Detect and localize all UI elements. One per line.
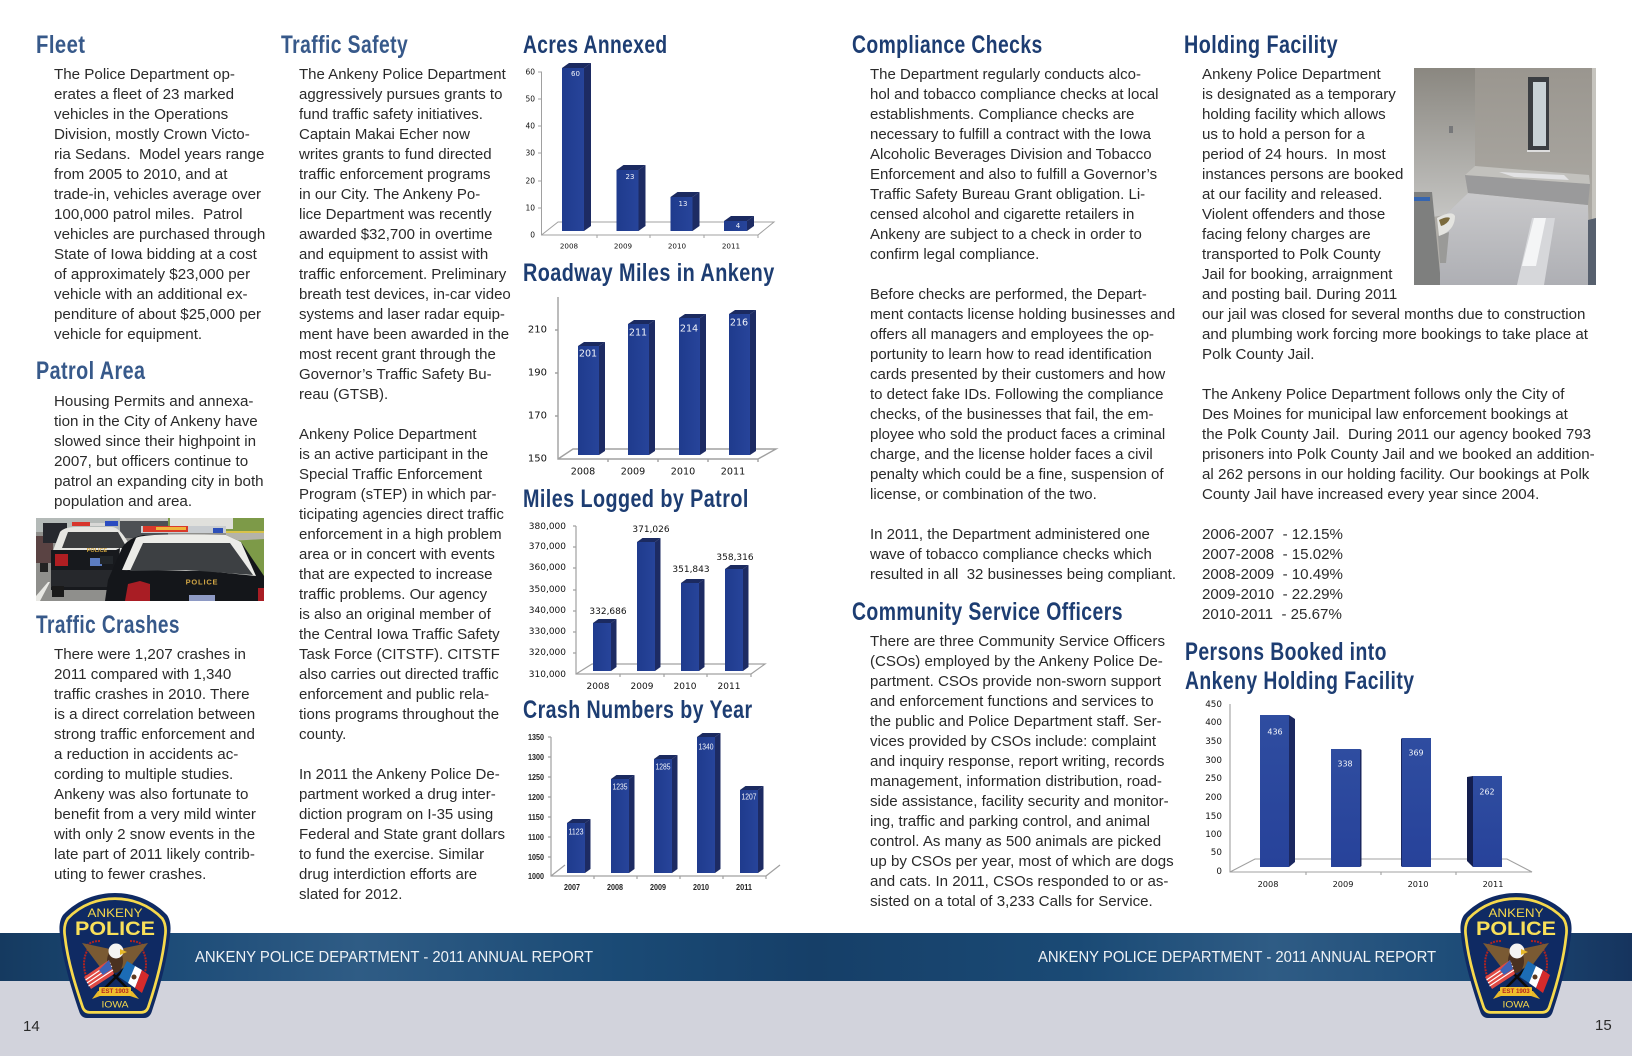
x axis labels: [571, 466, 745, 478]
shield text top: ANKENY: [88, 908, 143, 920]
bar 2009: [654, 755, 678, 873]
value labels: 23: [626, 173, 634, 181]
value labels: 371,026: [632, 525, 670, 535]
y axis labels: 300: [1205, 756, 1222, 766]
eagle and flags: [1483, 941, 1550, 995]
value labels: 369: [1408, 748, 1424, 758]
x axis labels: 2008: [587, 682, 610, 692]
x axis labels: 2008: [560, 242, 579, 250]
x axis labels: 2009: [650, 882, 666, 892]
y axis labels: 0: [530, 230, 535, 240]
y axis labels: 1050: [528, 852, 544, 862]
heading: Compliance Checks: Compliance Checks: [852, 31, 1043, 59]
x axis labels: 2009: [621, 466, 645, 478]
value labels: [568, 742, 757, 836]
y axis labels: 400: [1205, 718, 1222, 728]
x axis labels: [560, 242, 740, 250]
x axis labels: 2010: [1408, 879, 1428, 889]
y axis labels: 150: [1205, 812, 1222, 822]
text: Traffic Crashes: There were 1,207 crashes in 2011 compared with 1,340 traffic crashes in 2010. There is a direct correlation between strong traffic enforcement and a reduction in accidents ac- cording to multiple studies. Ankeny was also fortunate to benefit from a very mild winter with only 2 snow events in the late part of 2011 likely contrib- uting to fewer crashes.: [54, 646, 256, 883]
chart: Roadway Miles in Ankeny: [528, 297, 776, 478]
y axis labels: 40: [525, 122, 535, 130]
text: Traffic Safety: The Ankeny Police Department aggressively pursues grants to fund traffic safety initiatives. Captain Makai Echer now writes grants to fund directed traffic enforcement programs in our City. The Ankeny Po- lice Department was recently awarded $32,700 in overtime and equipment to assist with traffic enforcement. Preliminary breath test devices, in-car video systems and laser radar equip- ment have been awarded in the most recent grant through the Governor’s Traffic Safety Bu- reau (GTSB). Ankeny Police Department is an active participant in the Special Traffic Enforcement Program (sTEP) in which par- ticipating agencies direct traffic enforcement in a high problem area or in concert with events that are expected to increase traffic problems. Our agency is also an original member of the Central Iowa Traffic Safety Task Force (CITSTF). CITSTF also carries out directed traffic enforcement and public rela- tions programs throughout the county. In 2011 the Ankeny Police De- partment worked a drug inter- diction program on I-35 using Federal and State grant dollars to fund the exercise. Similar drug interdiction efforts are slated for 2012.: [299, 66, 511, 903]
heading: Persons Booked into Ankeny Holding Facility: [1185, 638, 1414, 695]
y axis labels: 190: [528, 368, 547, 378]
x axis labels: 2011: [722, 242, 740, 250]
heading: Acres Annexed: Acres Annexed: [523, 31, 668, 59]
heading: Persons Booked into Ankeny Holding Facility: Persons Booked into: [1185, 638, 1387, 666]
value labels: 332,686: [589, 607, 627, 617]
x axis labels: [587, 682, 740, 692]
y axis labels: [529, 522, 566, 680]
y axis labels: 20: [525, 176, 535, 186]
footer title right: ANKENY POLICE DEPARTMENT - 2011 ANNUAL REPORT: [1038, 949, 1436, 966]
x axis labels: 2011: [721, 466, 745, 478]
y axis labels: 1000: [528, 871, 544, 881]
axes and floor: [573, 526, 765, 677]
bar 2008: [593, 619, 616, 671]
value labels: 1123: [568, 828, 584, 836]
y axis labels: 1300: [528, 752, 544, 762]
x axis labels: 2011: [736, 882, 752, 892]
y axis labels: 250: [1205, 774, 1222, 784]
value labels: 358,316: [716, 553, 754, 563]
x axis labels: 2010: [671, 466, 695, 478]
eagle and flags: [82, 941, 149, 995]
heading: Traffic Crashes: Traffic Crashes: [36, 611, 180, 639]
bar 2010: [681, 579, 704, 671]
y axis labels: 150: [528, 454, 547, 464]
shield banner: EST 1903: [1502, 988, 1530, 995]
x axis labels: 2009: [614, 242, 633, 250]
value labels: 436: [1267, 728, 1283, 736]
chart: Miles Logged by Patrol: [529, 522, 765, 692]
value labels: 262: [1479, 788, 1495, 796]
axes and floor: [1230, 704, 1532, 875]
value labels: 201: [579, 348, 597, 360]
photo: police cars: POLICE: [186, 578, 218, 586]
x axis labels: 2009: [1333, 879, 1353, 889]
bar 2008: [562, 63, 591, 231]
x axis labels: [564, 882, 752, 892]
y axis labels: 0: [1216, 867, 1222, 877]
y axis labels: 350,000: [529, 585, 566, 595]
value labels: 13: [679, 200, 687, 208]
value labels: 211: [629, 328, 647, 338]
value labels: 216: [730, 318, 748, 328]
bar 2009: [1331, 749, 1362, 867]
bar 2008: [1260, 715, 1295, 867]
bar 2011: [725, 565, 748, 671]
text: Fleet: The Police Department op- erates a fleet of 23 marked vehicles in the Operations Division, mostly Crown Victo- ria Sedans. Model years range from 2005 to 2010, and at trade-in, vehicles average over 100,000 patrol miles. Patrol vehicles are purchased through State of Iowa bidding at a cost of approximately $23,000 per vehicle with an additional ex- penditure of about $25,000 per vehicle for equipment.: [54, 66, 265, 343]
text: Community Service Officers: There are three Community Service Officers (CSOs) employed by the Ankeny Police De- partment. CSOs provide non-sworn support and enforcement functions and services to the public and Police Department staff. Ser- vices provided by CSOs include: complaint and inquiry response, report writing, records management, information distribution, road- side assistance, facility security and monitor- ing, traffic and parking control, and animal control. As many as 500 animals are picked up by CSOs per year, most of which are dogs and cats. In 2011, CSOs responded to or as- sisted on a total of 3,233 Calls for Service.: [870, 633, 1174, 910]
photo: police cars: POLICE: [87, 548, 108, 554]
x axis labels: 2010: [674, 682, 697, 692]
shield text iowa: IOWA: [102, 1000, 129, 1010]
y axis labels: 1350: [528, 732, 544, 742]
value labels: 4: [736, 222, 741, 230]
heading: Community Service Officers: Community Service Officers: [852, 598, 1123, 626]
value labels: 1235: [612, 782, 628, 792]
x axis labels: 2011: [1483, 879, 1503, 889]
shield text police: POLICE: [75, 918, 155, 940]
photo: holding cell: [1414, 68, 1596, 285]
y axis labels: 210: [528, 324, 547, 336]
bar 2011: [1467, 776, 1502, 867]
bar 2010: [1401, 738, 1431, 867]
value labels: 1207: [742, 792, 757, 802]
logo: Ankeny Police shield right: [1460, 893, 1572, 1018]
y axis labels: [528, 732, 544, 881]
value labels: [1267, 728, 1495, 796]
y axis labels: 1200: [528, 792, 544, 802]
y axis labels: 30: [525, 148, 535, 158]
bar 2011: [724, 216, 754, 231]
footer band: [0, 933, 1632, 981]
logo: Ankeny Police shield left: [59, 893, 171, 1018]
heading: Miles Logged by Patrol: Miles Logged by Patrol: [523, 485, 749, 513]
chart: Acres Annexed: [525, 63, 774, 250]
heading: Traffic Safety: Traffic Safety: [281, 31, 408, 59]
y axis labels: [528, 324, 547, 464]
shield text police: POLICE: [1476, 918, 1556, 940]
x axis labels: 2007: [564, 882, 580, 892]
bar 2010: [670, 192, 700, 231]
heading: Crash Numbers by Year: Crash Numbers by Year: [523, 696, 753, 724]
x axis labels: 2010: [668, 242, 687, 250]
x axis labels: 2008: [607, 882, 623, 892]
y axis labels: 170: [528, 410, 547, 422]
bar 2010: [679, 314, 706, 455]
y axis labels: 320,000: [529, 648, 566, 658]
x axis labels: 2010: [693, 882, 709, 892]
footer title left: ANKENY POLICE DEPARTMENT - 2011 ANNUAL REPORT: [195, 949, 593, 966]
y axis labels: 370,000: [529, 542, 566, 552]
footer background: [0, 981, 1632, 1056]
bar 2008: [578, 342, 605, 455]
y axis labels: 380,000: [529, 522, 566, 532]
shield text top: ANKENY: [1488, 908, 1544, 920]
page number 14: 14: [23, 1018, 40, 1035]
bar 2011: [729, 310, 756, 455]
heading: Patrol Area: Patrol Area: [36, 357, 145, 385]
page number 15: 15: [1595, 1017, 1612, 1034]
bar 2009: [637, 538, 660, 671]
y axis labels: 1100: [528, 832, 544, 842]
photo: police cars: [36, 518, 264, 601]
value labels: 214: [680, 324, 698, 334]
value labels: 351,843: [672, 565, 710, 575]
bar 2009: [628, 320, 655, 455]
y axis labels: 1250: [528, 772, 544, 782]
value labels: 338: [1337, 760, 1353, 768]
shield text iowa: IOWA: [1502, 1000, 1530, 1010]
y axis labels: 1150: [528, 812, 544, 822]
y axis labels: 10: [525, 204, 535, 212]
y axis labels: 310,000: [529, 670, 566, 680]
y axis labels: 350: [1205, 737, 1222, 747]
value labels: 1340: [698, 742, 714, 752]
bar 2008: [611, 775, 634, 873]
y axis labels: [525, 68, 535, 240]
chart: Persons Booked into Ankeny Holding Facility: [1205, 700, 1532, 889]
x axis labels: 2009: [631, 682, 654, 692]
value labels: [589, 525, 754, 617]
axes and floor: [548, 737, 780, 879]
y axis labels: 100: [1205, 830, 1222, 840]
y axis labels: 50: [525, 94, 535, 104]
value labels: 1285: [656, 762, 671, 772]
value labels: 60: [571, 70, 580, 78]
y axis labels: 360,000: [529, 563, 566, 573]
x axis labels: 2008: [571, 466, 595, 478]
y axis labels: 340,000: [529, 606, 566, 616]
axes and floor: [538, 72, 774, 238]
x axis labels: 2008: [1258, 879, 1278, 889]
y axis labels: [1205, 700, 1222, 877]
y axis labels: 450: [1205, 700, 1222, 710]
y axis labels: 330,000: [529, 627, 566, 637]
x axis labels: [1258, 879, 1503, 889]
y axis labels: 50: [1211, 848, 1222, 858]
text: Holding Facility: Ankeny Police Department is designated as a temporary holding facility which allows us to hold a person for a period of 24 hours. In most instances persons are booked at our facility and released. Violent offenders and those facing felony charges are transported to Polk County Jail for booking, arraignment and posting bail. During 2011 our jail was closed for several months due to construction and plumbing work forcing more bookings to take place at Polk County Jail. The Ankeny Police Department follows only the City of Des Moines for municipal law enforcement bookings at the Polk County Jail. During 2011 our agency booked 793 prisoners into Polk County Jail and we booked an addition- al 262 persons in our holding facility. Our bookings at Polk County Jail have increased every year since 2004. 2006-2007 - 12.15% 2007-2008 - 15.02% 2008-2009 - 10.49% 2009-2010 - 22.29% 2010-2011 - 25.67%: [1202, 66, 1595, 623]
axes and floor: [555, 297, 776, 462]
x axis labels: 2011: [718, 682, 740, 692]
heading: Persons Booked into Ankeny Holding Facility: Ankeny Holding Facility: [1185, 667, 1414, 695]
shield banner: EST 1903: [101, 988, 129, 995]
value labels: [571, 70, 741, 230]
value labels: [579, 318, 748, 360]
bar 2007: [567, 819, 590, 873]
y axis labels: 200: [1205, 793, 1222, 803]
bar 2010: [697, 733, 720, 873]
chart: Crash Numbers by Year: [528, 732, 780, 892]
heading: Roadway Miles in Ankeny: Roadway Miles in Ankeny: [523, 259, 775, 287]
bar 2011: [740, 786, 764, 873]
bar 2009: [616, 165, 646, 231]
y axis labels: 60: [525, 68, 535, 76]
heading: Fleet: Fleet: [36, 31, 85, 59]
text: Patrol Area: Housing Permits and annexa- tion in the City of Ankeny have slowed since their highpoint in 2007, but officers continue to patrol an expanding city in both population and area.: [54, 393, 264, 510]
heading: Holding Facility: Holding Facility: [1184, 31, 1338, 59]
text: Compliance Checks: The Department regularly conducts alco- hol and tobacco compliance checks at local establishments. Compliance checks are necessary to fulfill a contract with the Iowa Alcoholic Beverages Division and Tobacco Enforcement and also to fulfill a Governor’s Traffic Safety Bureau Grant obligation. Li- censed alcohol and cigarette retailers in Ankeny are subject to a check in order to confirm legal compliance. Before checks are performed, the Depart- ment contacts license holding businesses and offers all managers and employees the op- portunity to learn how to read identification cards presented by their customers and how to detect fake IDs. Following the compliance checks, of the businesses that fail, the em- ployee who sold the product faces a criminal charge, and the license holder faces a civil penalty which could be a fine, suspension of license, or combination of the two. In 2011, the Department administered one wave of tobacco compliance checks which resulted in all 32 businesses being compliant.: [870, 66, 1176, 583]
